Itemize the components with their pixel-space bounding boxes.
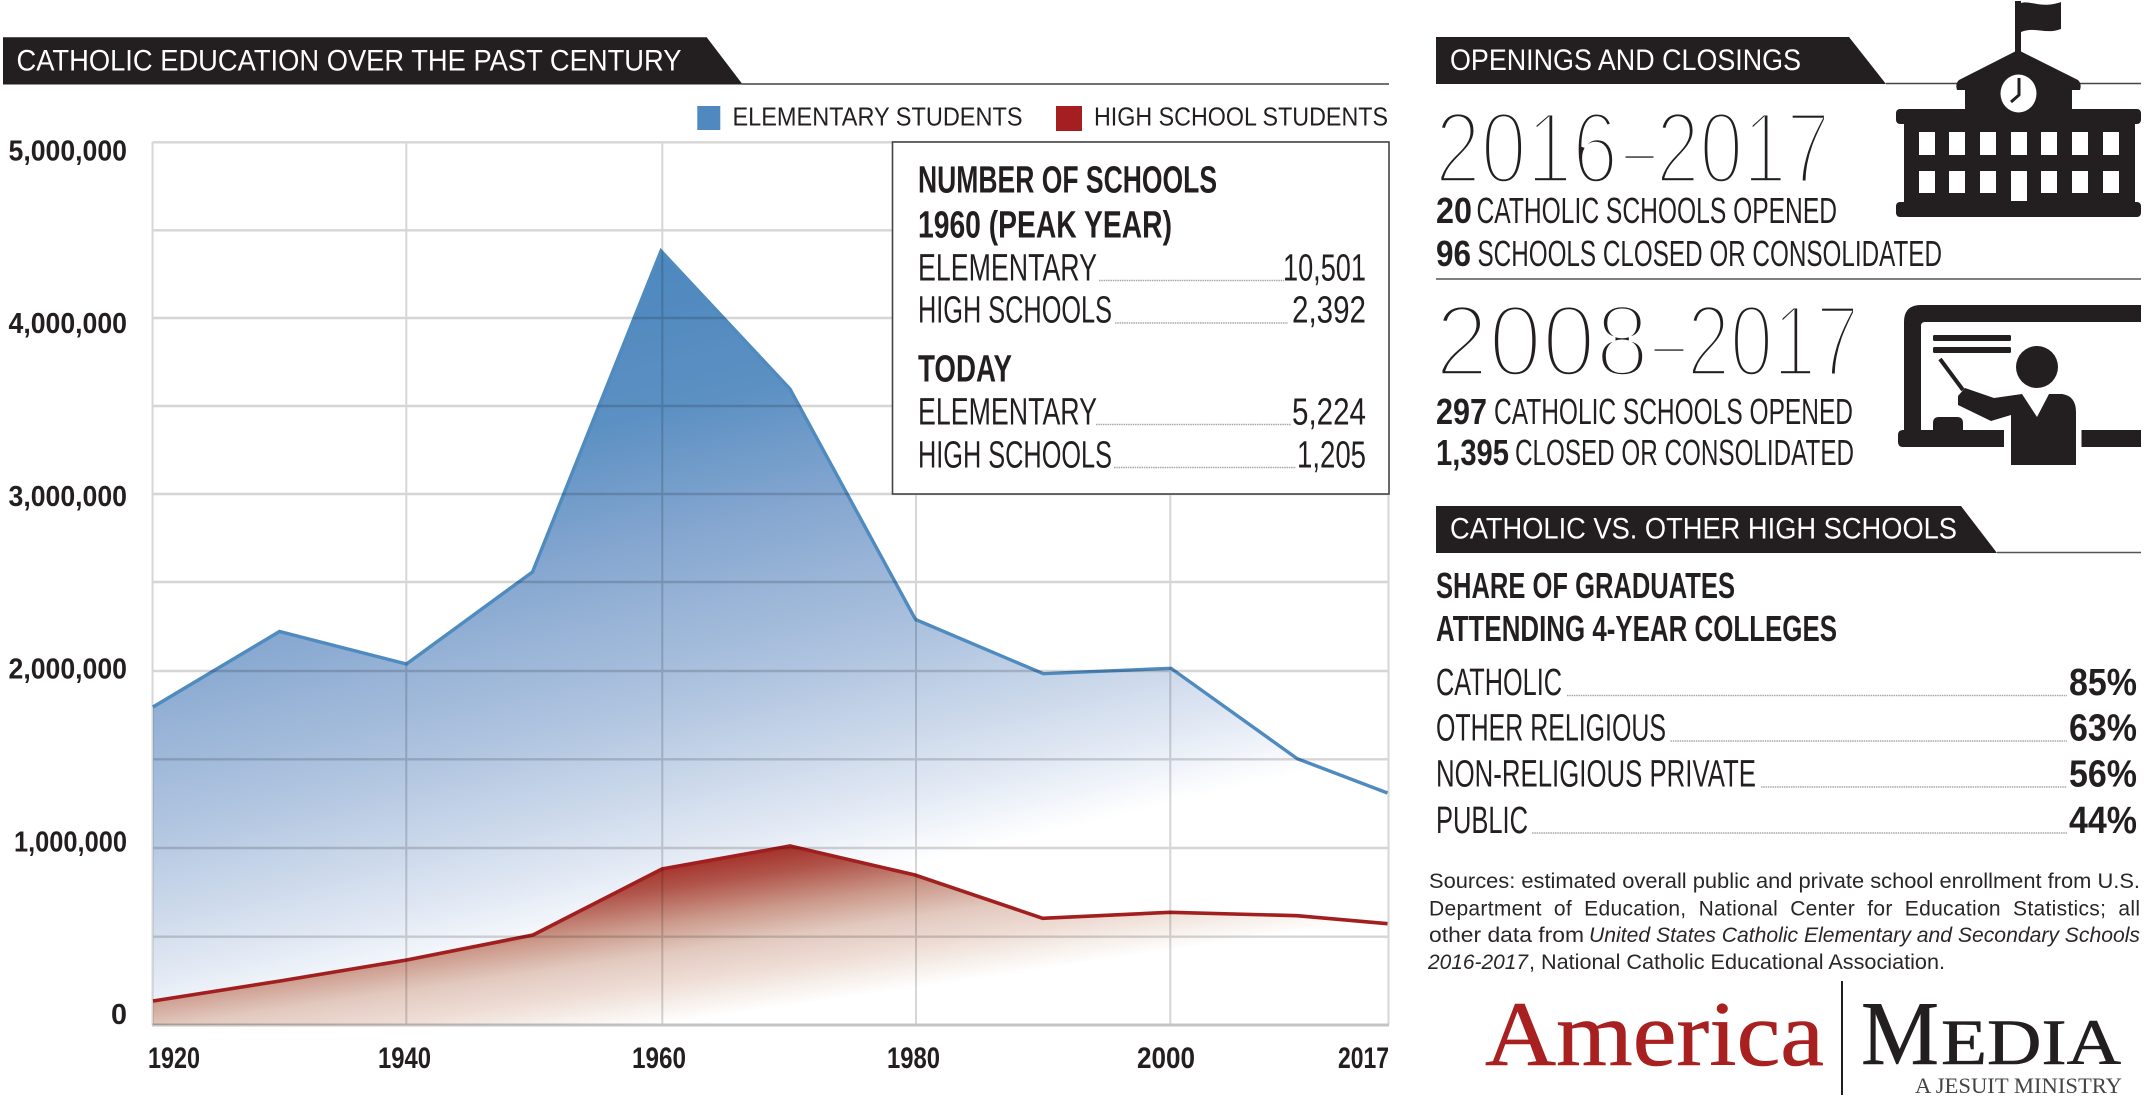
stat block: 2008-2017: CLOSED OR CONSOLIDATED	[1515, 432, 1854, 473]
text block: sources: Sources: estimated overall public and private school enrollment from U.S.	[1429, 870, 2140, 893]
logo: America Media	[1485, 981, 2122, 1098]
callout: number of schools: ELEMENTARY	[918, 392, 1097, 434]
area chart: elementary students	[153, 251, 1388, 1025]
icon: school building	[1896, 1, 2141, 217]
text block: sources: Department of Education, National Center for Education Statistics; all	[1429, 898, 2140, 920]
table: college attendance: 63%	[2069, 708, 2137, 750]
stat block: 2008-2017: 2017	[1687, 284, 1859, 398]
stat block: 2008-2017: 2008	[1435, 284, 1649, 398]
stat block: 2016-2017: –	[1624, 91, 1655, 205]
legend: ELEMENTARY STUDENTS	[732, 102, 1022, 132]
logo: America Media: A JESUIT MINISTRY	[1915, 1073, 2122, 1098]
stat block: 2008-2017: CATHOLIC SCHOOLS OPENED	[1494, 391, 1853, 432]
x axis labels: 1940	[378, 1042, 431, 1075]
y axis labels: 3,000,000	[8, 481, 127, 513]
table: college attendance: CATHOLIC	[1436, 662, 1562, 704]
heading: catholic vs other high schools	[1436, 506, 2141, 553]
y axis labels: 5,000,000	[8, 136, 127, 168]
panel: catholic vs other high schools	[1427, 506, 2141, 974]
callout: number of schools: ELEMENTARY	[918, 248, 1097, 290]
callout: number of schools: HIGH SCHOOLS	[918, 434, 1112, 476]
panel: openings and closings	[1435, 1, 2141, 473]
subheading: share of graduates: ATTENDING 4-YEAR COLLEGES	[1436, 608, 1837, 649]
logo: America Media: EDIA	[1941, 1007, 2121, 1079]
stat block: 2016-2017: CATHOLIC SCHOOLS OPENED	[1476, 190, 1837, 231]
y axis labels: 2,000,000	[8, 654, 127, 686]
callout: number of schools: HIGH SCHOOLS	[918, 290, 1112, 332]
callout: number of schools: 5,224	[1292, 392, 1366, 434]
table: college attendance: NON-RELIGIOUS PRIVATE	[1436, 754, 1756, 796]
heading: openings and closings	[1436, 37, 2141, 84]
y axis labels: 4,000,000	[8, 308, 127, 340]
y axis labels: 0	[111, 999, 127, 1031]
x axis labels	[148, 1042, 1389, 1075]
table: college attendance: 44%	[2069, 800, 2137, 842]
callout: number of schools: 1960 (PEAK YEAR)	[918, 204, 1172, 246]
logo: America Media: M	[1861, 983, 1939, 1084]
legend: HIGH SCHOOL STUDENTS	[1094, 102, 1388, 132]
x axis labels: 2000	[1137, 1042, 1195, 1075]
area chart: high school students	[153, 846, 1388, 1025]
table: college attendance	[1436, 662, 2137, 842]
x axis labels: 1960	[632, 1042, 686, 1075]
callout: number of schools: 10,501	[1283, 248, 1366, 290]
callout: number of schools: NUMBER OF SCHOOLS	[918, 160, 1217, 202]
stat block: 2016-2017: SCHOOLS CLOSED OR CONSOLIDATED	[1478, 233, 1942, 274]
text block: sources	[1427, 870, 2141, 974]
y axis labels: 1,000,000	[14, 826, 127, 858]
callout: number of schools: 1,205	[1297, 434, 1366, 476]
x axis labels: 1920	[148, 1042, 200, 1075]
heading: chart section: CATHOLIC EDUCATION OVER THE PAST CENTURY	[16, 44, 682, 78]
stat block: 2016-2017: 96	[1436, 233, 1471, 274]
table: college attendance: 56%	[2069, 754, 2137, 796]
stat block: 2008-2017: 297	[1436, 391, 1487, 432]
stat block: 2016-2017: 20	[1436, 190, 1472, 231]
x axis labels: 1980	[887, 1042, 940, 1075]
subheading: share of graduates	[1436, 565, 1837, 649]
text block: sources: 2016-2017	[1427, 951, 1529, 974]
callout: number of schools: TODAY	[918, 348, 1012, 390]
callout: number of schools: 2,392	[1292, 290, 1366, 332]
stat block: 2016-2017	[1435, 91, 1942, 274]
logo: America Media: America	[1485, 983, 1824, 1085]
stat block: 2008-2017: 1,395	[1436, 432, 1509, 473]
heading: catholic vs other high schools: CATHOLIC VS. OTHER HIGH SCHOOLS	[1450, 512, 1957, 546]
text block: sources: United States Catholic Elementary and Secondary Schools	[1589, 924, 2141, 947]
stat block: 2008-2017	[1435, 284, 1859, 473]
heading: openings and closings: OPENINGS AND CLOSINGS	[1450, 44, 1801, 77]
text block: sources: other data from	[1429, 924, 1584, 947]
legend	[697, 102, 1388, 132]
table: college attendance: OTHER RELIGIOUS	[1436, 708, 1666, 750]
table: college attendance: 85%	[2069, 662, 2137, 704]
subheading: share of graduates: SHARE OF GRADUATES	[1436, 565, 1735, 606]
y axis labels	[8, 136, 127, 1031]
stat block: 2016-2017: 2016	[1435, 91, 1618, 205]
text block: sources: , National Catholic Educational Association.	[1529, 951, 1945, 974]
table: college attendance: PUBLIC	[1436, 800, 1528, 842]
x axis labels: 2017	[1338, 1042, 1389, 1075]
heading: chart section	[3, 37, 1389, 84]
stat block: 2008-2017: –	[1653, 284, 1685, 398]
panel: catholic education chart	[3, 37, 1389, 1075]
callout: number of schools	[892, 142, 1389, 494]
icon: teacher at board	[1898, 305, 2141, 465]
stat block: 2016-2017: 2017	[1656, 91, 1830, 205]
